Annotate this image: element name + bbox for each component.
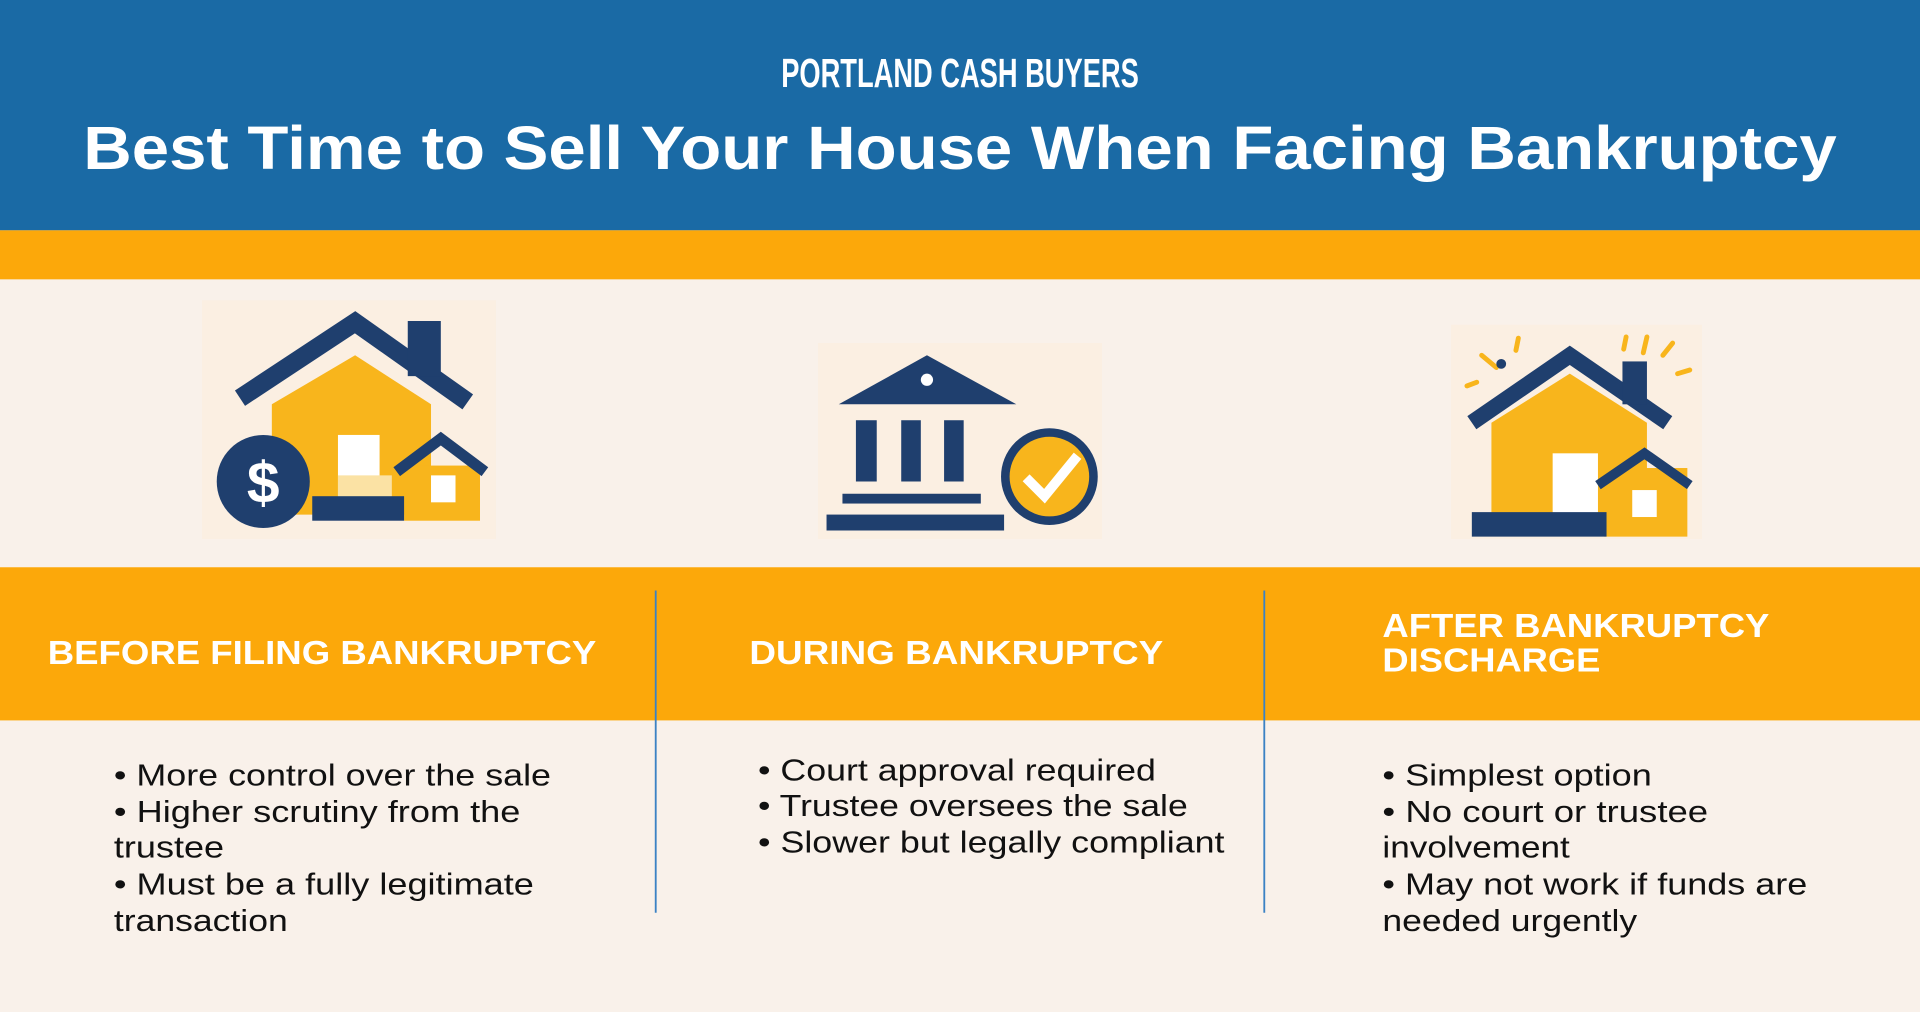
icon: house with sparkles <box>1451 325 1702 539</box>
bullets: after <box>1382 758 1807 938</box>
orange accent bar <box>0 230 1920 279</box>
icon: house with dollar <box>202 300 496 539</box>
bullets: before: trustee <box>114 831 224 865</box>
heading: after: AFTER BANKRUPTCY <box>1382 608 1769 645</box>
bullets: before <box>114 758 551 938</box>
icon: house with dollar: $ <box>247 450 280 515</box>
bullets: after: • Simplest option <box>1382 758 1652 792</box>
bullets: before: • More control over the sale <box>114 758 551 792</box>
bullets: after: • May not work if funds are <box>1382 867 1807 901</box>
bullets: during: • Slower but legally compliant <box>758 826 1225 860</box>
bullets: after: needed urgently <box>1382 904 1638 938</box>
bullets: after: involvement <box>1382 831 1570 865</box>
bullets: during <box>758 753 1225 860</box>
icon: courthouse with check <box>818 343 1102 539</box>
heading: during: DURING BANKRUPTCY <box>749 635 1163 672</box>
header band <box>0 0 1920 230</box>
brand name: PORTLAND CASH BUYERS <box>781 50 1139 96</box>
bullets: before: transaction <box>114 904 288 938</box>
orange header band: DISCHARGE <box>1382 642 1600 679</box>
bullets: before: • Must be a fully legitimate <box>114 867 534 901</box>
bullets: before: • Higher scrutiny from the <box>114 795 520 829</box>
orange header band <box>0 567 1920 720</box>
bullets: during: • Trustee oversees the sale <box>758 789 1188 823</box>
bullets: after: • No court or trustee <box>1382 795 1708 829</box>
heading: before: BEFORE FILING BANKRUPTCY <box>48 635 596 672</box>
bullets: during: • Court approval required <box>758 753 1156 787</box>
title: Best Time to Sell Your House When Facing Bankruptcy <box>83 114 1837 182</box>
